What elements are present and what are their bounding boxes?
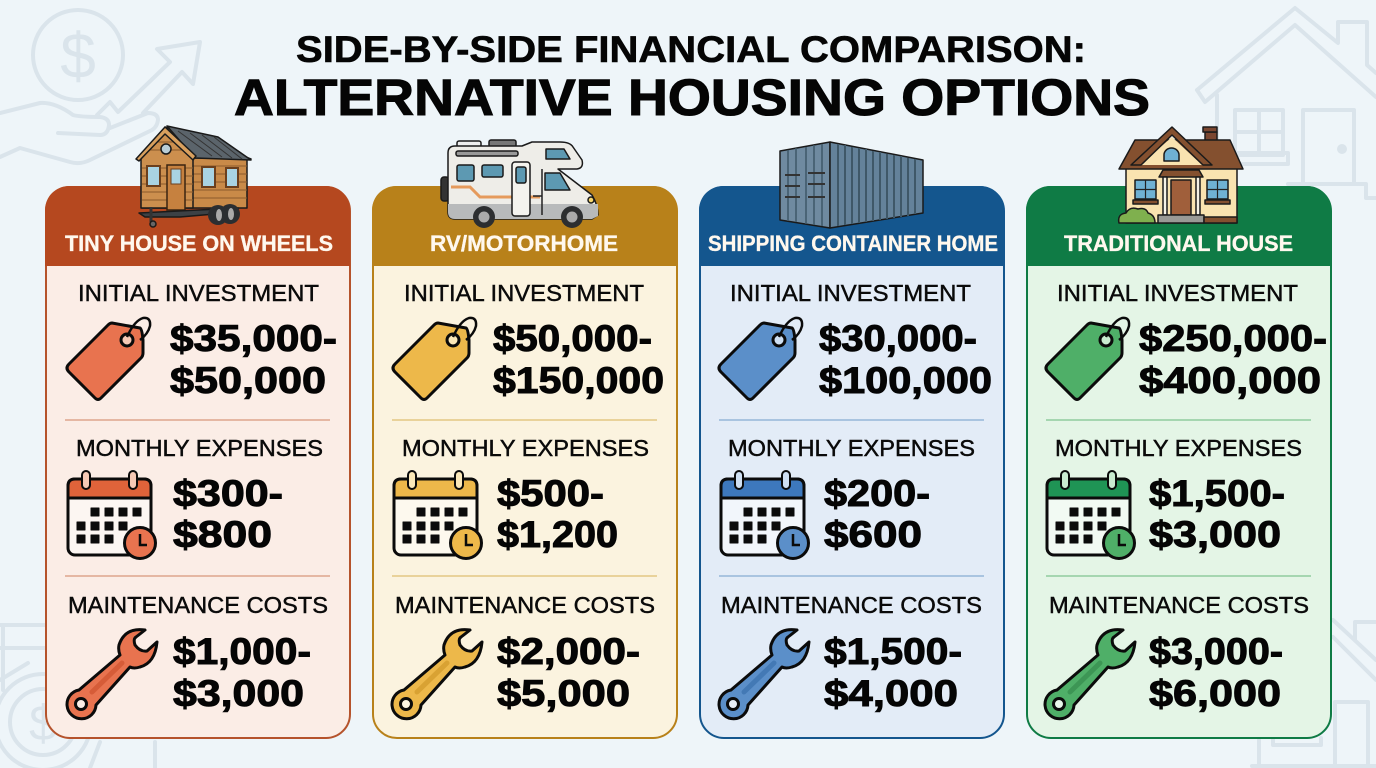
- price: $300-: [173, 473, 283, 514]
- label: MAINTENANCE COSTS: [68, 592, 328, 618]
- label: INITIAL INVESTMENT: [404, 280, 644, 306]
- price: $500-: [497, 473, 604, 514]
- price: $1,500-: [1149, 473, 1285, 514]
- title line 1: SIDE-BY-SIDE FINANCIAL COMPARISON:: [296, 29, 1086, 70]
- background icon: money in hand with rising arrow: $: [60, 20, 96, 92]
- price: $250,000-: [1139, 318, 1327, 359]
- title: [234, 29, 1150, 126]
- section: maintenance costs: [392, 592, 655, 719]
- panel: tiny house on wheels: [45, 126, 350, 738]
- icon: wrench: [1045, 630, 1135, 719]
- header label: RV/MOTORHOME: [430, 231, 618, 256]
- panel body: [700, 187, 1004, 738]
- panel body: [1027, 187, 1331, 738]
- price: $6,000: [1149, 673, 1281, 714]
- panel header: [699, 186, 1004, 266]
- header label: TRADITIONAL HOUSE: [1064, 231, 1293, 256]
- icon: traditional house: [1119, 127, 1243, 223]
- section: maintenance costs: [67, 592, 328, 719]
- price: $150,000: [493, 360, 664, 401]
- icon: price tag: [719, 318, 802, 400]
- price: $1,200: [497, 514, 618, 555]
- icon: wrench: [719, 630, 809, 719]
- background icon: money in hand with rising arrow: [0, 10, 200, 163]
- label: MAINTENANCE COSTS: [1049, 592, 1309, 618]
- section: initial investment: [393, 280, 664, 401]
- label: MAINTENANCE COSTS: [721, 592, 982, 618]
- icon: price tag: [1046, 318, 1129, 400]
- panel body: [46, 187, 350, 738]
- price: $3,000-: [1149, 631, 1283, 672]
- icon: calendar: [1047, 471, 1134, 558]
- icon: price tag: [393, 318, 476, 400]
- panel: traditional house: [1026, 127, 1331, 738]
- label: MONTHLY EXPENSES: [728, 435, 975, 461]
- section: maintenance costs: [1045, 592, 1309, 719]
- price: $3,000: [173, 673, 304, 714]
- price: $50,000-: [493, 318, 652, 359]
- panel header: [45, 186, 350, 266]
- icon: tiny house: [136, 126, 251, 227]
- icon: wrench: [392, 630, 482, 719]
- background icon: house outline bottom right: [1252, 620, 1376, 768]
- price: $35,000-: [170, 318, 337, 359]
- icon: price tag: [67, 318, 150, 400]
- price: $2,000-: [497, 631, 640, 672]
- price: $600: [824, 514, 922, 555]
- icon: shipping container: [780, 142, 923, 228]
- header label: TINY HOUSE ON WHEELS: [65, 231, 333, 256]
- panel header: [1026, 186, 1331, 266]
- background icon: house outline top right: [1197, 8, 1376, 200]
- label: MONTHLY EXPENSES: [1055, 435, 1302, 461]
- section: monthly expenses: [721, 435, 975, 558]
- section: monthly expenses: [1047, 435, 1302, 558]
- price: $200-: [824, 473, 930, 514]
- price: $50,000: [170, 360, 326, 401]
- price: $1,500-: [824, 631, 962, 672]
- background icon: coin and building bottom left: [0, 625, 155, 768]
- price: $30,000-: [819, 318, 977, 359]
- label: MONTHLY EXPENSES: [76, 435, 323, 461]
- price: $800: [173, 514, 272, 555]
- price: $5,000: [497, 673, 630, 714]
- icon: calendar: [68, 471, 156, 558]
- label: MAINTENANCE COSTS: [395, 592, 655, 618]
- background icon: coin and building bottom left: $: [29, 695, 57, 751]
- label: INITIAL INVESTMENT: [78, 280, 319, 306]
- label: INITIAL INVESTMENT: [730, 280, 971, 306]
- panel body: [373, 187, 677, 738]
- section: initial investment: [719, 280, 992, 401]
- icon: wrench: [67, 630, 157, 719]
- price: $3,000: [1149, 514, 1281, 555]
- icon: calendar: [394, 471, 482, 558]
- price: $400,000: [1139, 360, 1321, 401]
- section: initial investment: [67, 280, 337, 401]
- label: MONTHLY EXPENSES: [402, 435, 649, 461]
- panel: shipping container home: [699, 142, 1004, 738]
- section: maintenance costs: [719, 592, 982, 719]
- section: initial investment: [1046, 280, 1327, 401]
- icon: calendar: [721, 471, 808, 558]
- section: monthly expenses: [68, 435, 323, 558]
- price: $100,000: [819, 360, 992, 401]
- panel: RV/motorhome: [372, 140, 677, 738]
- panel header: [372, 186, 677, 266]
- price: $4,000: [824, 673, 958, 714]
- label: INITIAL INVESTMENT: [1057, 280, 1298, 306]
- price: $1,000-: [173, 631, 311, 672]
- title line 2: ALTERNATIVE HOUSING OPTIONS: [234, 69, 1150, 126]
- section: monthly expenses: [394, 435, 649, 558]
- header label: SHIPPING CONTAINER HOME: [708, 231, 998, 256]
- icon: motorhome: [441, 140, 598, 228]
